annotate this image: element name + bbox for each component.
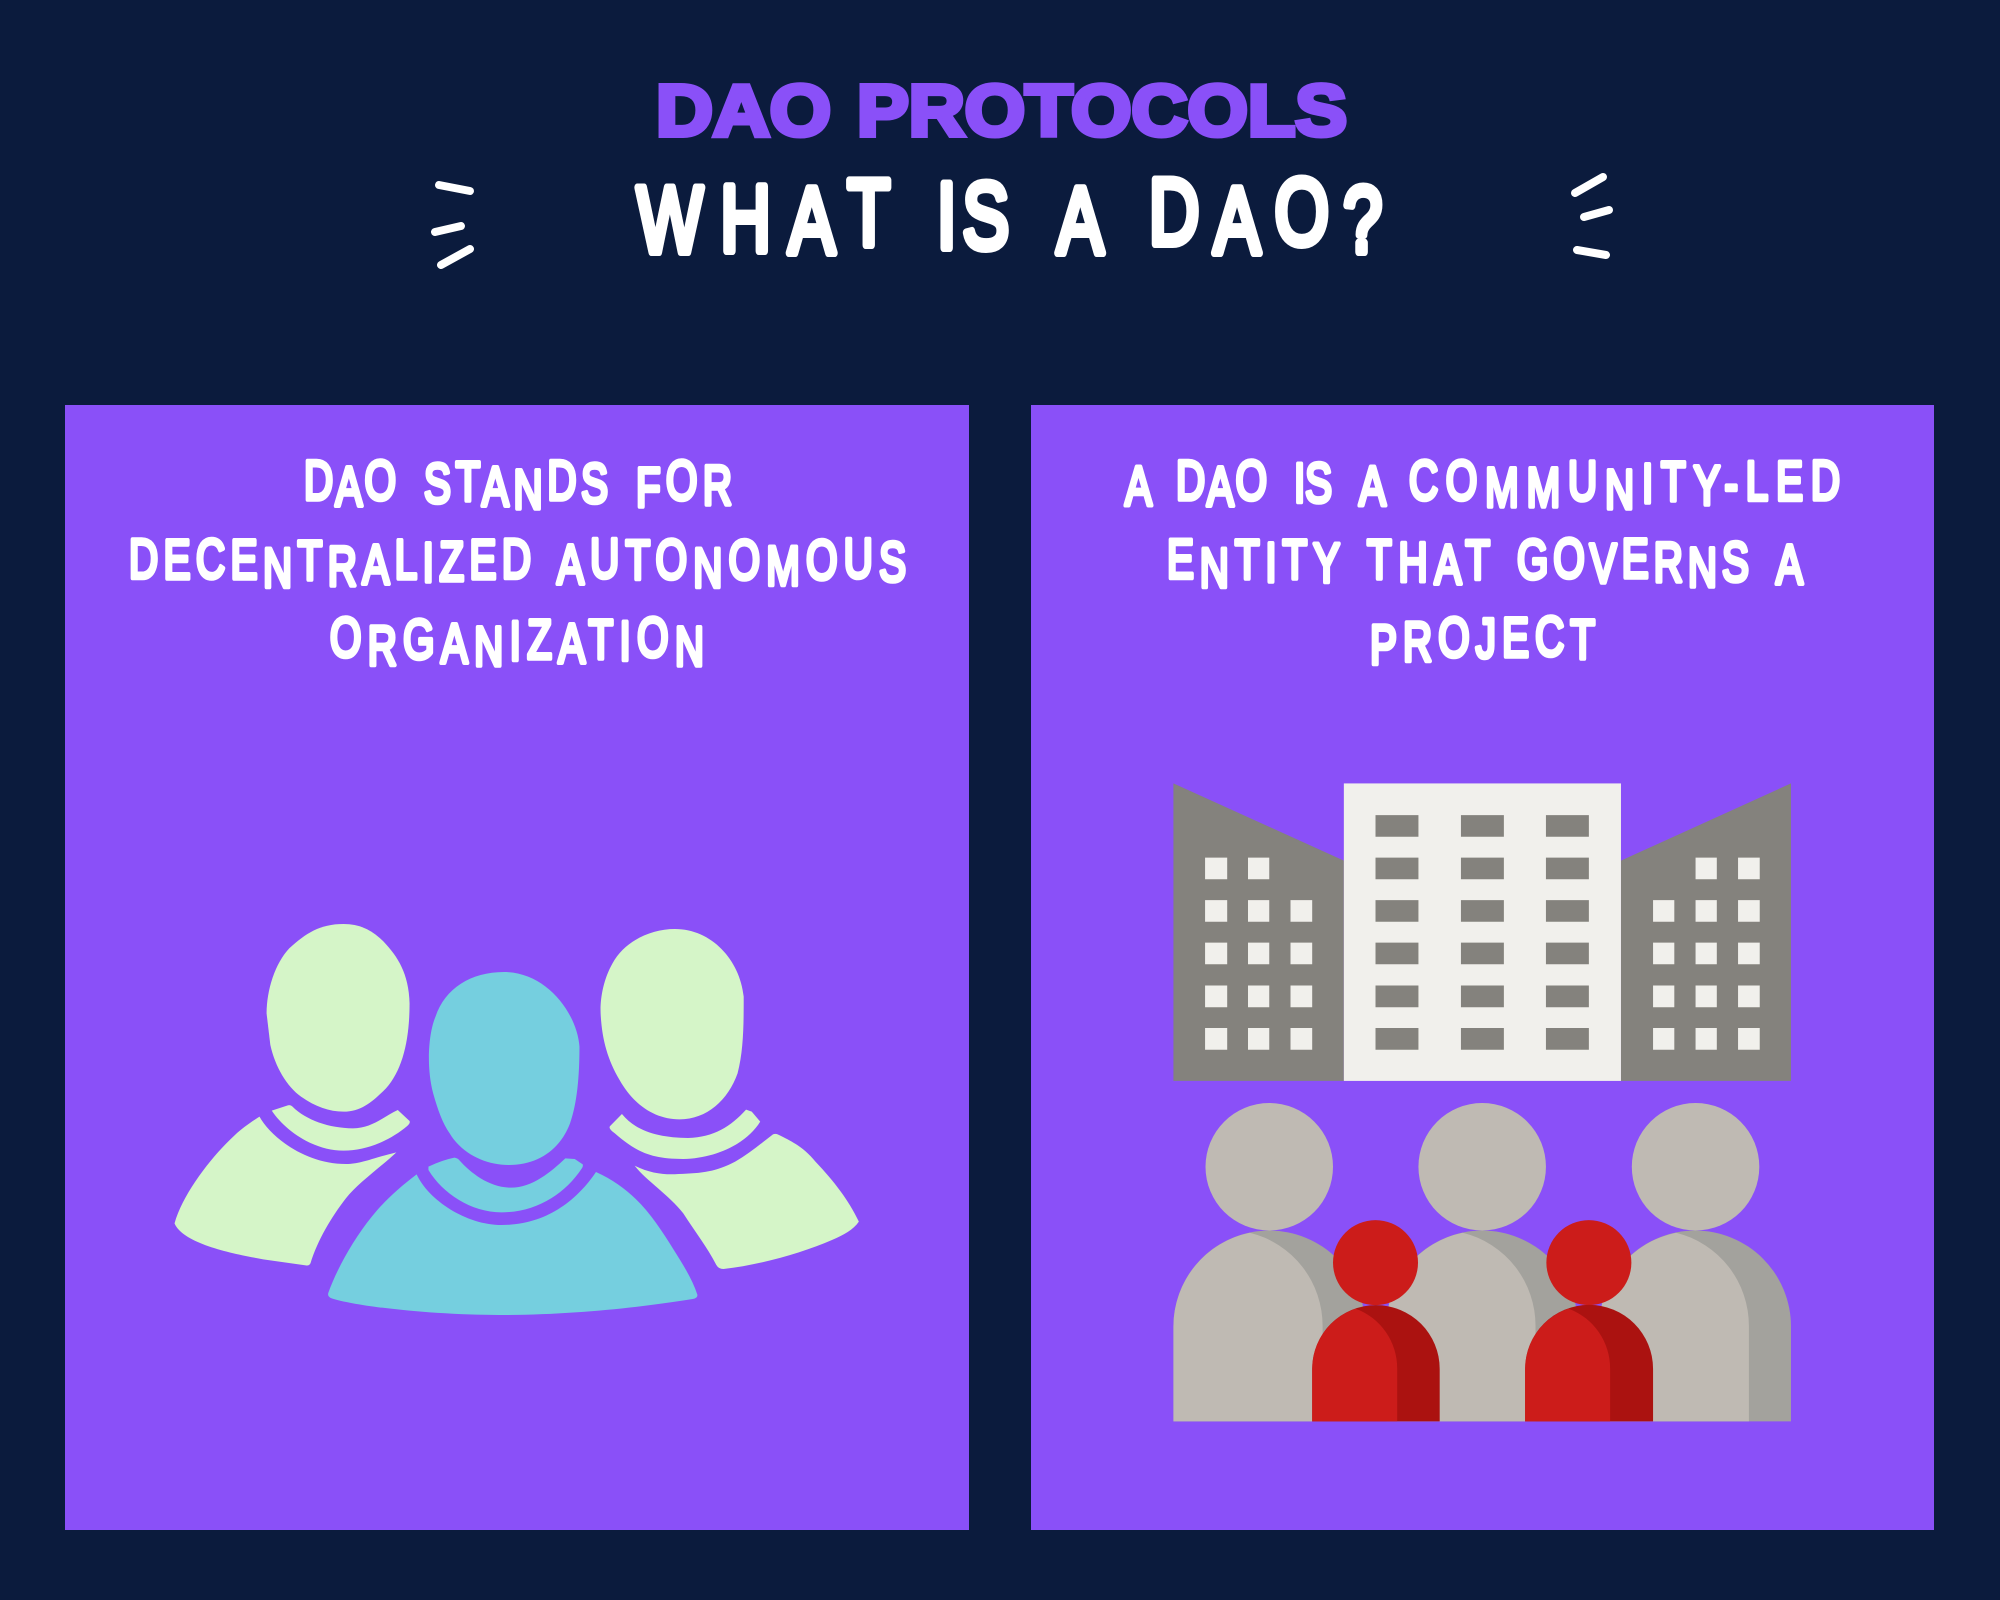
icon: buildings and community bbox=[1173, 783, 1791, 1421]
heading: DAO PROTOCOLS: DAO bbox=[656, 72, 831, 152]
panel text: a DAO is a community-led entity that governs a project bbox=[1125, 450, 1840, 677]
title: WHAT IS A DAO? bbox=[637, 159, 1382, 273]
decorative ticks: left of title bbox=[435, 185, 470, 265]
panel text: a DAO is a community-led entity that governs a project: DAO bbox=[1176, 450, 1267, 518]
figure: grey person left bbox=[1173, 1103, 1365, 1421]
panel text: a DAO is a community-led entity that governs a project: GOVERNS bbox=[1517, 528, 1749, 599]
icon: group of three people bbox=[175, 924, 859, 1315]
panel text: a DAO is a community-led entity that governs a project: A bbox=[1776, 534, 1803, 596]
figure: red person right bbox=[1525, 1220, 1653, 1421]
title: WHAT IS A DAO?: A bbox=[1057, 168, 1103, 273]
panel text: DAO stands for decentralized autonomous organization: ORGANIZATION bbox=[330, 607, 704, 678]
building: centre tower bbox=[1344, 783, 1621, 1081]
figure: red person left bbox=[1312, 1220, 1440, 1421]
panel text: a DAO is a community-led entity that governs a project: THAT bbox=[1367, 529, 1490, 596]
panel text: a DAO is a community-led entity that governs a project: A bbox=[1125, 456, 1152, 518]
panel text: DAO stands for decentralized autonomous organization: STANDS bbox=[424, 450, 608, 521]
panel text: a DAO is a community-led entity that governs a project: COMMUNITY-LED bbox=[1409, 450, 1840, 521]
panel text: DAO stands for decentralized autonomous organization: DAO bbox=[304, 450, 396, 518]
panel text: a DAO is a community-led entity that governs a project: PROJECT bbox=[1370, 606, 1595, 677]
person: front centre bbox=[328, 972, 697, 1315]
panel text: DAO stands for decentralized autonomous organization: AUTONOMOUS bbox=[557, 528, 906, 599]
panel text: DAO stands for decentralized autonomous organization bbox=[129, 450, 906, 678]
decorative ticks: right of title bbox=[1575, 177, 1609, 255]
person: back left bbox=[175, 924, 410, 1265]
heading: DAO PROTOCOLS: PROTOCOLS bbox=[857, 72, 1347, 152]
panel: what DAO stands for bbox=[65, 405, 969, 1530]
panel text: a DAO is a community-led entity that governs a project: ENTITY bbox=[1167, 529, 1340, 600]
title: WHAT IS A DAO?: WHAT bbox=[637, 160, 890, 273]
panel text: DAO stands for decentralized autonomous organization: FOR bbox=[636, 450, 732, 519]
panel: community-led entity bbox=[1031, 405, 1934, 1530]
building: right wing bbox=[1621, 783, 1791, 1081]
heading: DAO PROTOCOLS bbox=[656, 72, 1347, 152]
building: left wing bbox=[1173, 783, 1344, 1081]
panel text: a DAO is a community-led entity that governs a project: IS bbox=[1294, 453, 1332, 515]
title: WHAT IS A DAO?: DAO? bbox=[1149, 159, 1382, 273]
title: WHAT IS A DAO?: IS bbox=[937, 163, 1009, 268]
figure: grey person right bbox=[1599, 1103, 1791, 1421]
figure: grey person centre bbox=[1386, 1103, 1578, 1421]
person: back right bbox=[601, 929, 859, 1269]
panel text: DAO stands for decentralized autonomous organization: DECENTRALIZED bbox=[129, 529, 531, 600]
panel text: a DAO is a community-led entity that governs a project: A bbox=[1359, 456, 1386, 518]
